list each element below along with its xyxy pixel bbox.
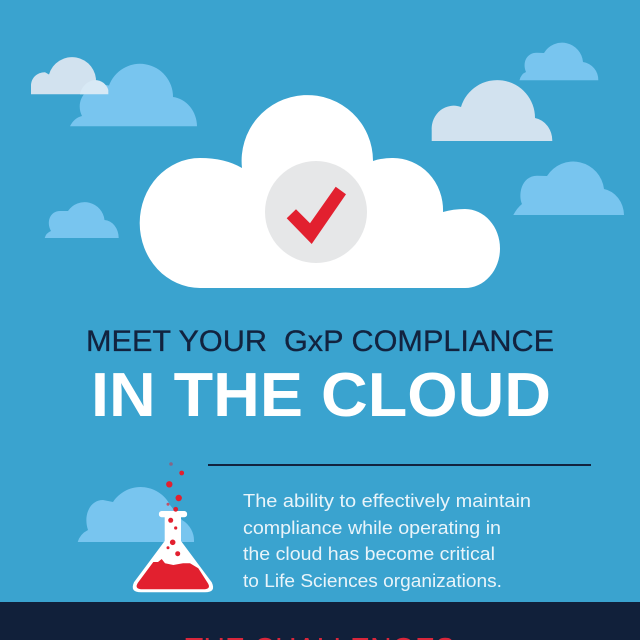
icon: check mark badge — [265, 161, 367, 263]
intro text: the cloud has become critical — [243, 544, 495, 564]
cloud overlap highlight — [80, 80, 108, 94]
heading line two: IN THE CLOUD — [91, 361, 551, 430]
heading line one: MEET YOUR GxP COMPLIANCE — [86, 325, 554, 358]
cloud: pale right — [432, 80, 552, 141]
intro text: compliance while operating in — [243, 518, 501, 538]
divider line — [208, 464, 591, 466]
intro text: to Life Sciences organizations. — [243, 571, 502, 591]
cloud: small left — [45, 202, 119, 238]
dark footer band — [0, 602, 640, 640]
cloud: top left pale — [31, 57, 97, 94]
icon: flask with bubbles — [133, 462, 213, 592]
cloud: top left blue — [70, 64, 197, 126]
intro text — [243, 491, 531, 591]
cloud: top right blue — [520, 43, 598, 80]
main white cloud — [140, 95, 500, 288]
cloud: right blue — [513, 162, 624, 215]
intro text: The ability to effectively maintain — [243, 491, 531, 511]
cloud behind flask — [78, 487, 194, 542]
